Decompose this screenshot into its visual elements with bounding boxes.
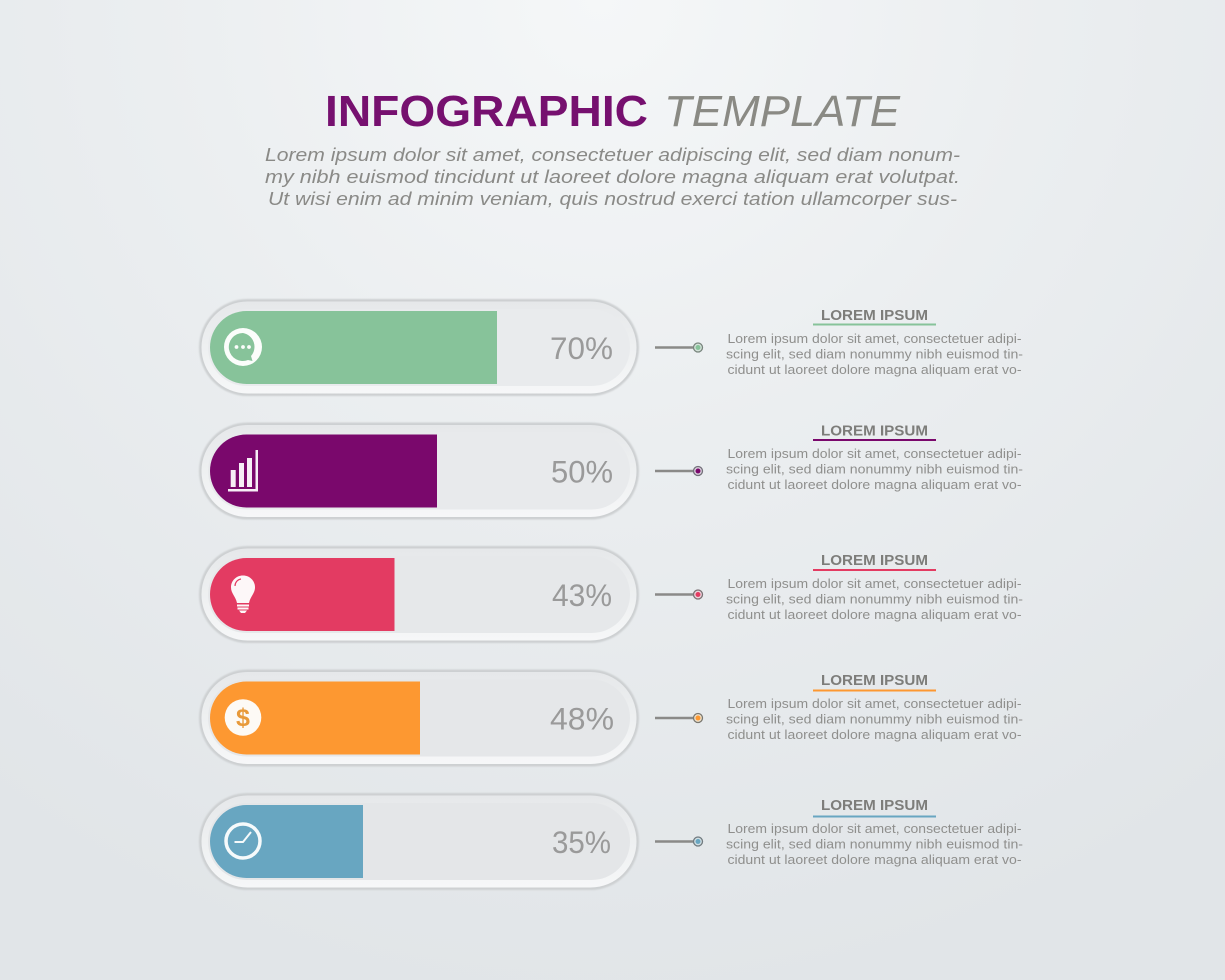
subtitle text block: [265, 144, 960, 209]
text block: item 1: [726, 308, 1023, 377]
panel: progress bar 70%: [199, 299, 639, 396]
icon: dollar coin: $: [236, 704, 250, 732]
icon: chat bubble: [224, 328, 262, 366]
icon: clock: [226, 824, 260, 858]
text block: item 1: scing elit, sed diam nonummy nibh euismod tin-: [726, 346, 1023, 362]
text block: item 1: LOREM IPSUM: [821, 308, 928, 324]
text block: item 1: cidunt ut laoreet dolore magna aliquam erat vo-: [728, 362, 1022, 377]
text block: item 3: Lorem ipsum dolor sit amet, consectetuer adipi-: [728, 576, 1022, 591]
bar fill: blue: [210, 805, 363, 878]
icon: dollar coin: [225, 699, 261, 736]
title: [325, 88, 901, 136]
text block: item 5: LOREM IPSUM: [821, 798, 928, 814]
connector: 35%: [655, 837, 702, 846]
text block: item 4: scing elit, sed diam nonummy nibh euismod tin-: [726, 712, 1023, 726]
text block: item 4: Lorem ipsum dolor sit amet, consectetuer adipi-: [728, 696, 1022, 711]
text block: item 4: LOREM IPSUM: [821, 673, 928, 689]
text block: item 2: Lorem ipsum dolor sit amet, consectetuer adipi-: [728, 446, 1022, 461]
text block: item 3: scing elit, sed diam nonummy nibh euismod tin-: [726, 592, 1023, 606]
text block: item 5: cidunt ut laoreet dolore magna aliquam erat vo-: [728, 852, 1022, 867]
percentage: 43%: 43%: [552, 577, 612, 613]
bar fill: green: [210, 311, 497, 384]
text block: item 5: [726, 798, 1023, 867]
text block: item 3: cidunt ut laoreet dolore magna aliquam erat vo-: [728, 607, 1022, 622]
subtitle text block: Lorem ipsum dolor sit amet, consectetuer adipiscing elit, sed diam nonum-: [265, 144, 960, 165]
text block: item 1: Lorem ipsum dolor sit amet, consectetuer adipi-: [728, 331, 1022, 346]
panel: progress bar 48%: [199, 670, 639, 766]
panel: progress bar 43%: [199, 546, 639, 643]
text block: item 4: [726, 673, 1023, 742]
bar fill: red: [210, 558, 394, 631]
text block: item 3: [726, 553, 1023, 622]
subtitle text block: my nibh euismod tincidunt ut laoreet dolore magna aliquam erat volutpat.: [265, 166, 960, 187]
percentage: 50%: 50%: [551, 454, 613, 490]
panel: progress bar 35%: [199, 793, 639, 890]
text block: item 2: cidunt ut laoreet dolore magna aliquam erat vo-: [728, 477, 1022, 492]
text block: item 2: scing elit, sed diam nonummy nibh euismod tin-: [726, 462, 1023, 476]
panel: progress bar 50%: [199, 422, 639, 520]
bar fill: orange: [210, 682, 420, 754]
text block: item 2: [726, 424, 1023, 492]
text block: item 2: LOREM IPSUM: [821, 424, 928, 440]
connector: 48%: [655, 714, 702, 722]
title: INFOGRAPHIC: [325, 88, 648, 136]
percentage: 35%: 35%: [552, 824, 611, 860]
text block: item 5: scing elit, sed diam nonummy nibh euismod tin-: [726, 836, 1023, 852]
percentage: 48%: 48%: [550, 700, 614, 736]
percentage: 70%: 70%: [550, 330, 613, 366]
connector: 70%: [655, 343, 702, 352]
icon: light bulb: [231, 576, 255, 613]
connector: 50%: [655, 466, 702, 476]
connector: 43%: [655, 590, 702, 599]
text block: item 4: cidunt ut laoreet dolore magna aliquam erat vo-: [728, 727, 1022, 742]
text block: item 5: Lorem ipsum dolor sit amet, consectetuer adipi-: [728, 821, 1022, 836]
bar fill: purple: [210, 434, 437, 508]
title: TEMPLATE: [664, 88, 901, 136]
icon: bar chart: [228, 450, 258, 492]
subtitle text block: Ut wisi enim ad minim veniam, quis nostrud exerci tation ullamcorper sus-: [268, 188, 957, 209]
text block: item 3: LOREM IPSUM: [821, 553, 928, 569]
